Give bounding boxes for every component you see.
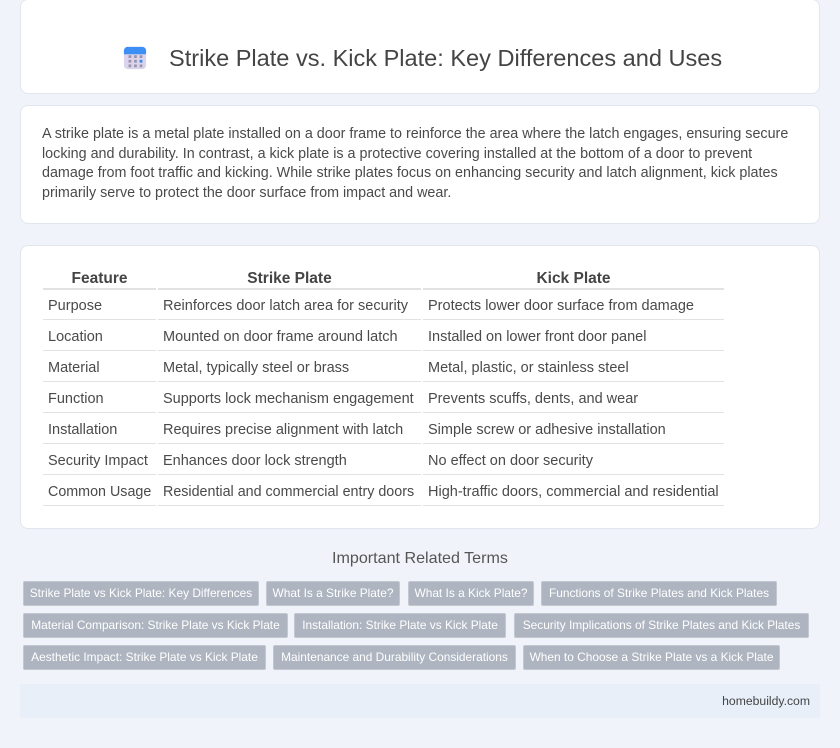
row: Function: Supports lock mechanism engagement (163, 391, 414, 407)
tag: What Is a Kick Plate? (414, 586, 528, 600)
tag: Strike Plate vs Kick Plate: Key Differences (30, 586, 252, 600)
row: Material: Metal, plastic, or stainless steel (428, 360, 629, 376)
tag: When to Choose a Strike Plate vs a Kick Plate (530, 650, 773, 664)
icon: calendar (124, 46, 146, 70)
row: Location (43, 329, 724, 351)
row: Location: Location (48, 329, 103, 345)
row: Installation: Requires precise alignment with latch (163, 422, 403, 438)
title: Strike Plate vs. Kick Plate: Key Differences and Uses (169, 45, 722, 71)
row: Security Impact (43, 453, 724, 475)
intro paragraph: primarily serve to protect the door surface from impact and wear. (42, 184, 451, 200)
tag (23, 613, 288, 638)
table header: Feature (72, 270, 128, 287)
tag: Maintenance and Durability Considerations (281, 650, 508, 664)
row: Purpose: Reinforces door latch area for security (163, 298, 408, 314)
table header: Strike Plate (247, 270, 332, 287)
tag (523, 645, 780, 670)
intro paragraph: locking and durability. In contrast, a kick plate is a protective covering installed at the bottom of a door to prevent (42, 146, 752, 162)
tag (23, 645, 266, 670)
comparison table panel (20, 245, 820, 529)
tag: Material Comparison: Strike Plate vs Kick Plate (31, 618, 280, 632)
row: Common Usage: High-traffic doors, commercial and residential (428, 484, 719, 500)
table header (72, 270, 611, 287)
related terms heading: Important Related Terms (332, 549, 508, 567)
row: header rule (43, 288, 724, 290)
row: Common Usage: Common Usage (48, 484, 151, 500)
table header: Kick Plate (536, 270, 611, 287)
row: Function: Function (48, 391, 104, 407)
row: Security Impact: Enhances door lock strength (163, 453, 347, 469)
tag (294, 613, 506, 638)
tag: Aesthetic Impact: Strike Plate vs Kick Plate (31, 650, 258, 664)
row: Function: Prevents scuffs, dents, and wear (428, 391, 638, 407)
tag: Functions of Strike Plates and Kick Plates (549, 586, 769, 600)
row: Installation (43, 422, 724, 444)
tag: What Is a Strike Plate? (273, 586, 393, 600)
row: Material: Material (48, 360, 100, 376)
tag (273, 645, 516, 670)
row: Purpose: Protects lower door surface from damage (428, 298, 694, 314)
row: Material (43, 360, 724, 382)
row: Purpose (43, 298, 724, 320)
tag (541, 581, 777, 606)
intro paragraph: damage from foot traffic and kicking. While strike plates focus on enhancing security and latch alignment, kick plates (42, 165, 778, 181)
intro paragraph: A strike plate is a metal plate installed on a door frame to reinforce the area where the latch engages, ensuring secure (42, 126, 788, 142)
intro text panel (20, 105, 820, 224)
row: Purpose: Purpose (48, 298, 102, 314)
row: Location: Installed on lower front door panel (428, 329, 646, 345)
row: Common Usage: Residential and commercial entry doors (163, 484, 414, 500)
row: Common Usage (43, 484, 724, 506)
row: Security Impact: No effect on door security (428, 453, 593, 469)
tag (23, 581, 259, 606)
tag: Security Implications of Strike Plates and Kick Plates (523, 618, 800, 632)
footer bar (20, 684, 820, 718)
row: Material: Metal, typically steel or brass (163, 360, 349, 376)
tag (266, 581, 400, 606)
row: Location: Mounted on door frame around latch (163, 329, 398, 345)
header panel (20, 0, 820, 94)
footer source text: homebuildy.com (722, 694, 810, 708)
tag (514, 613, 809, 638)
intro paragraph (42, 126, 788, 200)
row: Function (43, 391, 724, 413)
row: Installation: Installation (48, 422, 117, 438)
row: Security Impact: Security Impact (48, 453, 148, 469)
row: Installation: Simple screw or adhesive installation (428, 422, 666, 438)
tag (408, 581, 534, 606)
tag: Installation: Strike Plate vs Kick Plate (302, 618, 498, 632)
related terms tags (23, 581, 809, 670)
